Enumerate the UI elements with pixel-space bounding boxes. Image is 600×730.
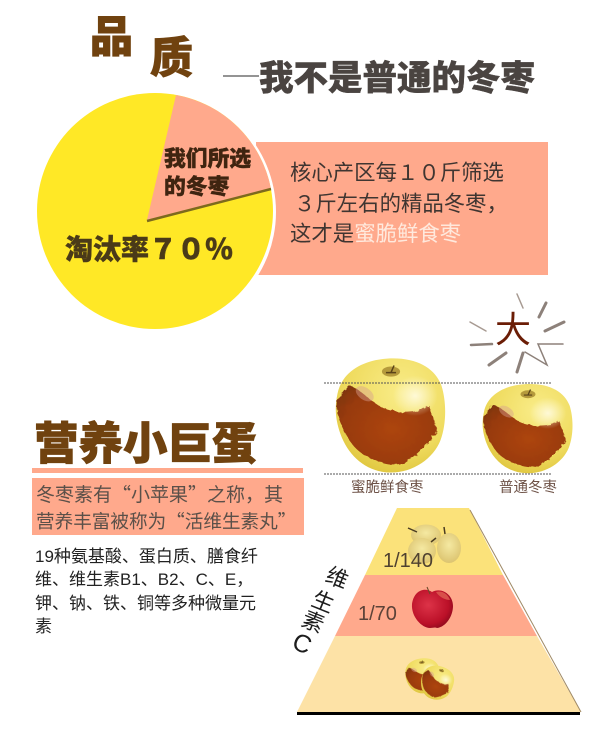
label: 普通冬枣: 普通冬枣 (499, 479, 557, 496)
text: nutrient list (35, 547, 258, 636)
icon: starburst with 大: 大 (495, 309, 531, 350)
label: 维生素C: 维 (322, 562, 352, 594)
pie label: selected: 我们所选 (164, 146, 251, 171)
subtitle: 我不是普通的冬枣: 我不是普通的冬枣 (259, 60, 535, 98)
pie label: selected (164, 146, 251, 199)
icon: pears (408, 524, 461, 564)
panel: quality description: 核心产区每１０斤筛选 (290, 156, 504, 187)
panel: quality description: ３斤左右的精品冬枣， (294, 187, 508, 218)
pie label: rejection rate 70%: 淘汰率７０％ (65, 234, 233, 265)
image: large jujube (336, 358, 445, 473)
label: 维生素C: C (288, 628, 316, 660)
dotted guide lines (324, 383, 551, 474)
panel: nutrition callout: 营养丰富被称为“活维生素丸” (36, 507, 296, 534)
label: 维生素C: 素 (298, 606, 328, 638)
panel: nutrition callout (32, 478, 304, 535)
icon: apple (412, 587, 453, 628)
text: nutrient list: 19种氨基酸、蛋白质、膳食纤 (35, 547, 258, 566)
divider bar (32, 468, 303, 473)
heading: 质: 质 (150, 35, 193, 83)
text: nutrient list: 钾、钠、铁、铜等多种微量元 (35, 594, 256, 613)
pie label: selected: 的冬枣 (164, 174, 230, 199)
label: 维生素C: 生 (308, 586, 338, 618)
text: nutrient list: 素 (35, 617, 52, 636)
label: 1/70: 1/70 (358, 603, 397, 625)
chart: vitamin C pyramid (297, 508, 581, 715)
panel: quality description: 这才是蜜脆鲜食枣 (290, 217, 461, 248)
heading: 品: 品 (90, 14, 133, 62)
text: nutrient list: 维、维生素B1、B2、C、E， (35, 570, 253, 589)
label: 蜜脆鲜食枣: 蜜脆鲜食枣 (351, 478, 424, 496)
label: 1/140: 1/140 (383, 550, 433, 572)
image: normal jujube (483, 384, 573, 473)
label: 维生素C (288, 562, 352, 660)
icon: jujubes (404, 657, 458, 704)
pie chart: rejection rate (34, 91, 276, 333)
heading: 营养小巨蛋: 营养小巨蛋 (34, 420, 257, 469)
panel: quality description (256, 142, 548, 275)
panel: nutrition callout: 冬枣素有“小苹果”之称，其 (36, 480, 283, 507)
icon: starburst with 大 (470, 294, 564, 372)
